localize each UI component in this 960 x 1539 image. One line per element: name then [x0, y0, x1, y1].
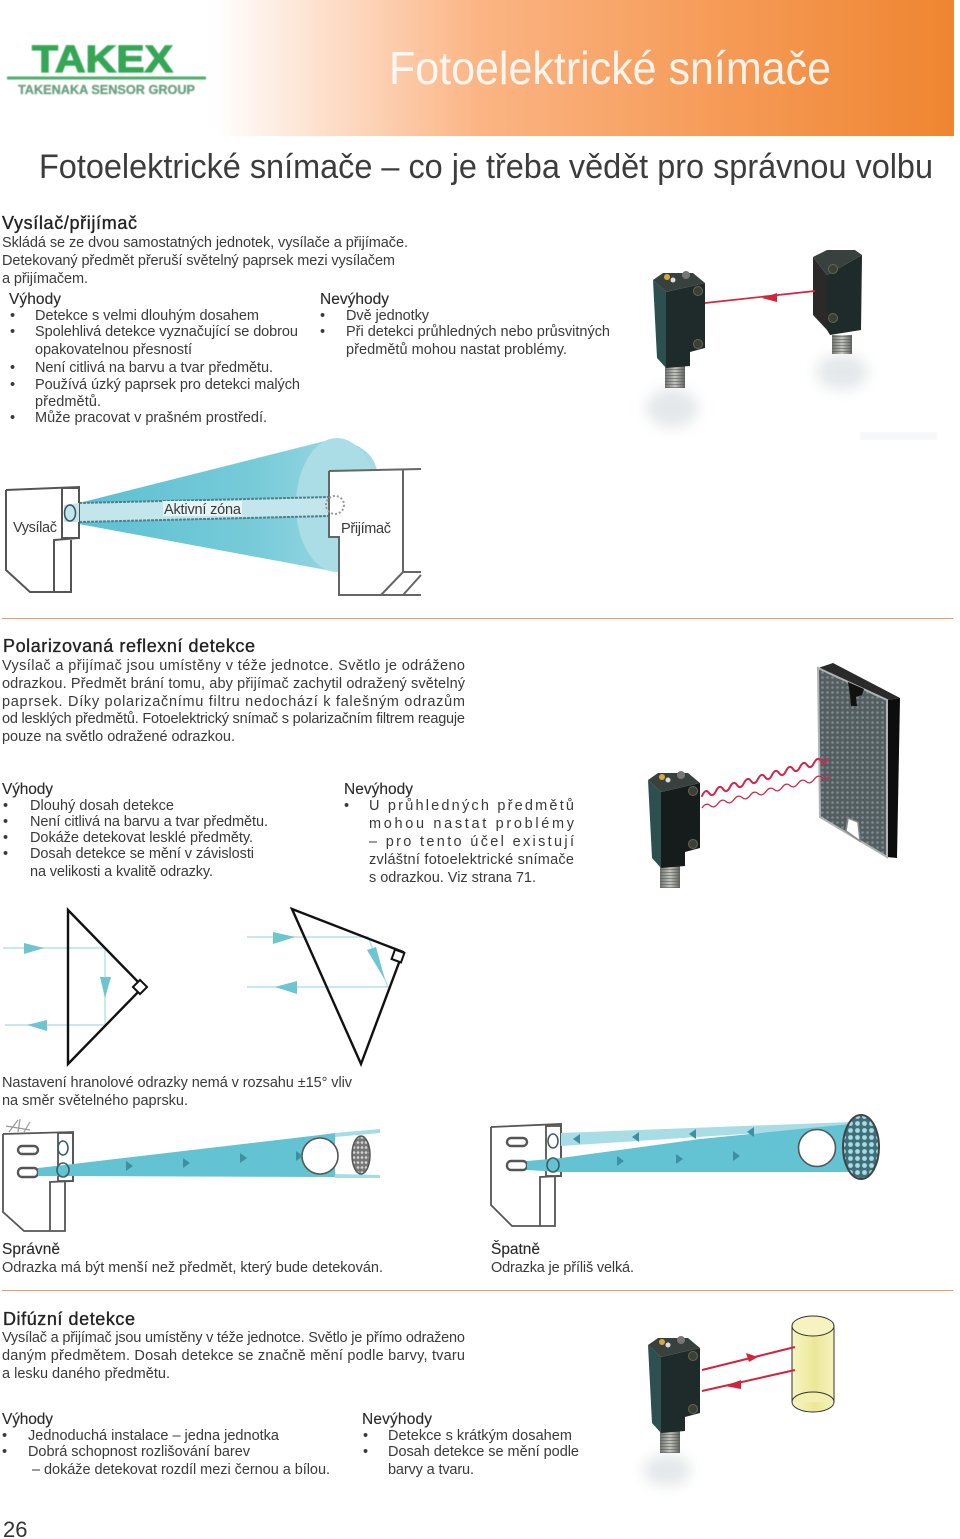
advantages	[2, 781, 268, 880]
diagram: correct reflector size	[3, 1119, 380, 1231]
advantages: Dosah detekce se mění v závislosti	[30, 846, 254, 862]
logo: TAKEX: TAKEX	[32, 39, 174, 81]
light beam	[38, 1133, 335, 1177]
disadvantages	[320, 291, 610, 358]
caption: wrong	[491, 1241, 634, 1276]
prism caption: Nastavení hranolové odrazky nemá v rozsahu ±15° vliv	[2, 1075, 353, 1091]
advantages: opakovatelnou přesností	[35, 342, 192, 358]
prism caption	[2, 1075, 353, 1109]
description: a lesku daného předmětu.	[2, 1366, 170, 1382]
caption: wrong: Špatně	[491, 1241, 540, 1258]
sensor	[648, 771, 700, 888]
light cone	[79, 438, 378, 572]
disadvantages: – pro tento účel existují	[369, 834, 574, 850]
cylinder	[792, 1316, 834, 1412]
caption: correct: Správně	[2, 1241, 60, 1258]
heading: Vysílač/přijímač	[2, 213, 137, 233]
description: odrazkou. Předmět brání tomu, aby přijímač zachytil odražený světelný	[2, 676, 466, 692]
section: Difúzní detekce text	[2, 1309, 579, 1478]
advantages: Výhody	[2, 1411, 53, 1428]
sensor housing	[491, 1124, 561, 1226]
advantages: – dokáže detekovat rozdíl mezi černou a bílou.	[32, 1462, 330, 1478]
advantages: Výhody	[2, 781, 53, 798]
object circle	[302, 1138, 338, 1174]
sensor: receiver	[646, 271, 705, 428]
advantages: Dobrá schopnost rozlišování barev	[28, 1444, 251, 1460]
description: Detekovaný předmět přeruší světelný paprsek mezi vysílačem	[2, 253, 395, 269]
object circle	[798, 1130, 836, 1166]
prism	[292, 909, 403, 1064]
disadvantages: Dvě jednotky	[346, 308, 430, 324]
disadvantages: Dosah detekce se mění podle	[388, 1444, 579, 1460]
beam edges	[335, 1129, 380, 1178]
label: Vysílač: Vysílač	[13, 520, 57, 536]
disadvantages: Nevýhody	[362, 1411, 432, 1428]
reflector	[843, 1115, 879, 1179]
logo: TAKEX	[7, 39, 206, 97]
sensor	[643, 1336, 700, 1486]
advantages	[2, 1411, 330, 1478]
red beam arrow	[705, 291, 815, 303]
light rays	[3, 948, 105, 1025]
advantages: •	[10, 377, 15, 393]
advantages: •	[10, 360, 15, 376]
disadvantages	[362, 1411, 579, 1478]
description	[2, 235, 408, 287]
advantages: •	[3, 798, 8, 814]
advantages: na velikosti a kvalitě odrazky.	[30, 864, 213, 880]
description	[2, 1330, 465, 1382]
disadvantages: s odrazkou. Viz strana 71.	[369, 870, 536, 886]
receiver unit	[326, 469, 421, 595]
disadvantages	[344, 781, 575, 886]
reflector	[352, 1136, 370, 1174]
advantages: •	[3, 814, 8, 830]
light beam	[527, 1124, 850, 1172]
disadvantages: Při detekci průhledných nebo průsvitných	[346, 324, 610, 340]
lens	[57, 1141, 69, 1177]
section: Polarizovaná reflexní detekce text	[2, 636, 575, 886]
advantages: •	[10, 308, 15, 324]
disadvantages: •	[363, 1428, 368, 1444]
corner marker	[392, 950, 404, 962]
logo: TAKEX: TAKENAKA SENSOR GROUP	[18, 83, 195, 97]
advantages: Detekce s velmi dlouhým dosahem	[35, 308, 259, 324]
description: Skládá se ze dvou samostatných jednotek, vysílače a přijímače.	[2, 235, 408, 251]
diagram: prism reflection straight	[3, 910, 147, 1064]
diagram: active zone	[6, 438, 421, 595]
disadvantages: zvláštní fotoelektrické snímače	[369, 852, 574, 868]
advantages: •	[10, 324, 15, 340]
disadvantages: •	[320, 324, 325, 340]
disadvantages: U průhledných předmětů	[369, 798, 574, 814]
disadvantages: Nevýhody	[320, 291, 389, 308]
caption: wrong: Odrazka je příliš velká.	[491, 1260, 634, 1276]
direction markers	[573, 1127, 754, 1166]
page heading: Fotoelektrické snímače – co je třeba vědět pro správnou volbu	[39, 148, 933, 186]
advantages: Spolehlivá detekce vyznačující se dobrou	[35, 324, 298, 340]
label: Přijímač: Přijímač	[341, 521, 391, 537]
advantages: Může pracovat v prašném prostředí.	[35, 410, 267, 426]
description: pouze na světlo odražené odrazkou.	[2, 729, 235, 745]
corner marker	[133, 980, 147, 994]
description: Vysílač a přijímač jsou umístěny v téže jednotce. Světlo je přímo odraženo	[2, 1330, 465, 1346]
disadvantages: •	[320, 308, 325, 324]
advantages: předmětů.	[35, 394, 101, 410]
section: Vysílač/přijímač text	[2, 213, 610, 426]
direction markers	[126, 1151, 303, 1171]
arrowheads	[24, 943, 111, 1031]
diagram: prism reflection rotated	[247, 909, 404, 1064]
description: Vysílač a přijímač jsou umístěny v téže jednotce. Světlo je odráženo	[2, 658, 465, 674]
light rays	[247, 937, 388, 987]
header banner	[215, 0, 954, 136]
caption: correct	[2, 1241, 383, 1276]
advantages: Jednoduchá instalace – jedna jednotka	[28, 1428, 280, 1444]
label: Aktivní zóna: Aktivní zóna	[164, 502, 242, 518]
description	[2, 658, 466, 745]
red arrows	[702, 1347, 795, 1391]
illustration: sensor and reflector	[648, 663, 900, 888]
caption: correct: Odrazka má být menší než předmět, který bude detekován.	[2, 1260, 383, 1276]
description: daným předmětem. Dosah detekce se značně mění podle barvy, tvaru	[2, 1348, 465, 1364]
advantages: Výhody	[9, 291, 61, 308]
advantages: •	[10, 410, 15, 426]
disadvantages: Detekce s krátkým dosahem	[388, 1428, 572, 1444]
advantages: Není citlivá na barvu a tvar předmětu.	[35, 360, 273, 376]
advantages: •	[2, 1428, 7, 1444]
divider	[2, 1290, 953, 1291]
sensor housing	[3, 1132, 73, 1231]
return beam	[561, 1122, 850, 1146]
advantages	[9, 291, 300, 426]
disadvantages: barvy a tvaru.	[388, 1462, 474, 1478]
advantages: Dokáže detekovat lesklé předměty.	[30, 830, 253, 846]
advantages: •	[3, 830, 8, 846]
prism	[68, 910, 143, 1064]
wavy light beams	[702, 759, 830, 808]
advantages: Není citlivá na barvu a tvar předmětu.	[30, 814, 268, 830]
disadvantages: Nevýhody	[344, 781, 413, 798]
diagram: wrong reflector size	[491, 1115, 879, 1226]
emitter unit	[6, 487, 79, 592]
heading: Difúzní detekce	[3, 1309, 135, 1329]
disadvantages: •	[344, 798, 349, 814]
lens	[547, 1134, 559, 1172]
arrowheads	[273, 932, 385, 994]
description: a přijímačem.	[2, 271, 88, 287]
illustration: diffuse sensor and cylinder	[643, 1316, 834, 1486]
illustration: two sensors with red beam	[646, 250, 937, 440]
sensor: emitter	[813, 250, 868, 390]
advantages: •	[3, 846, 8, 862]
divider	[2, 618, 953, 619]
sunburst	[6, 1119, 30, 1132]
advantages: Dlouhý dosah detekce	[30, 798, 174, 814]
description: paprsek. Díky polarizačnímu filtru nedochází k falešným odrazům	[2, 694, 465, 710]
disadvantages: mohou nastat problémy	[369, 816, 575, 832]
disadvantages: předmětů mohou nastat problémy.	[346, 342, 567, 358]
advantages: Používá úzký paprsek pro detekci malých	[35, 377, 300, 393]
disadvantages: •	[363, 1444, 368, 1460]
description: od lesklých předmětů. Fotoelektrický snímač s polarizačním filtrem reaguje	[2, 711, 465, 727]
prism caption: na směr světelného paprsku.	[2, 1093, 188, 1109]
heading: Polarizovaná reflexní detekce	[3, 636, 255, 656]
advantages: •	[2, 1444, 7, 1460]
banner title: Fotoelektrické snímače	[389, 42, 831, 94]
reflector	[818, 663, 900, 858]
